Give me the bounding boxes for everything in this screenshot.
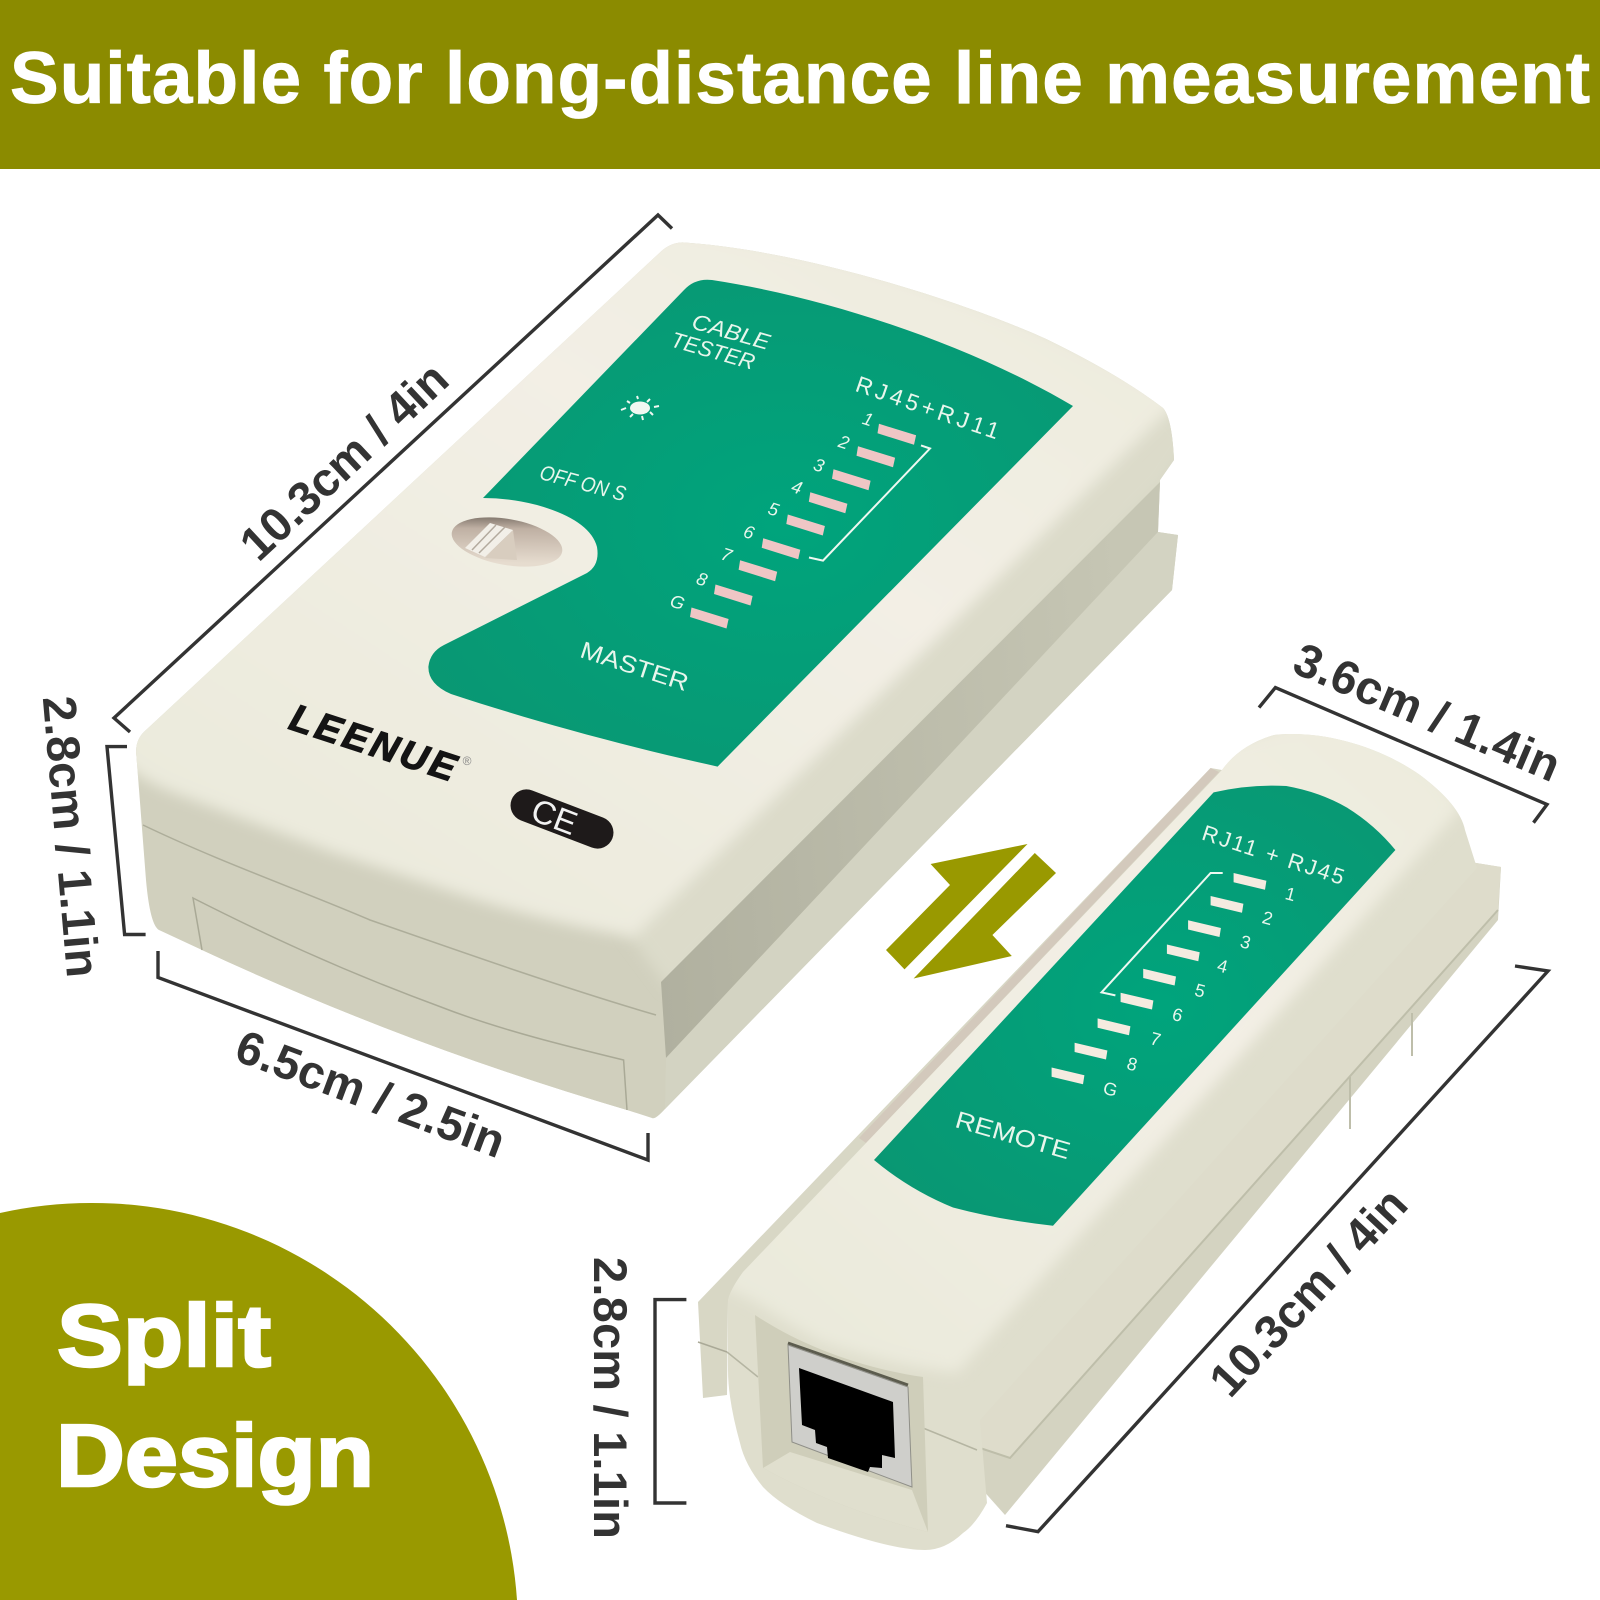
panel text: RJ45+RJ11 [852, 371, 1003, 444]
panel text: TESTER [668, 327, 758, 375]
indicator numbers: 4 [1215, 955, 1230, 977]
panel text [537, 309, 1003, 697]
CE badge [505, 783, 619, 856]
green label panel [874, 786, 1395, 1226]
master unit device [120, 230, 1195, 1118]
dimension: master height [33, 694, 146, 979]
panel text: RJ11 + RJ45 [1199, 820, 1348, 890]
indicator numbers: 8 [694, 568, 710, 590]
green label panel [428, 280, 1073, 767]
panel text: OFF ON S [537, 461, 628, 506]
indicator numbers: 7 [719, 544, 735, 566]
dimension: master width: 6.5cm / 2.5in [229, 1019, 513, 1168]
heading: split design: Split [57, 1286, 271, 1385]
indicator numbers: 5 [766, 498, 782, 521]
dimension: remote height: 2.8cm / 1.1in [584, 1257, 637, 1539]
panel text [952, 820, 1348, 1165]
indicator numbers: 6 [741, 521, 758, 544]
title: Suitable for long-distance line measurement [10, 38, 1590, 119]
heading: split design [56, 1286, 374, 1505]
dimension: master length [114, 215, 672, 732]
panel text: MASTER [577, 637, 692, 697]
pair bracket [809, 445, 930, 561]
indicator numbers [1101, 883, 1298, 1101]
brand logo: LEENUE [284, 697, 463, 791]
indicator numbers: 2 [1260, 907, 1275, 929]
indicator numbers [668, 408, 876, 614]
indicator numbers: 5 [1193, 980, 1207, 1002]
brand logo: ® [463, 754, 472, 768]
indicator numbers: 2 [835, 431, 852, 453]
dimension: remote width: 3.6cm / 1.4in [1286, 632, 1569, 792]
indicator numbers: G [1101, 1078, 1120, 1101]
dimension: remote length [1006, 966, 1548, 1532]
status indicators [1052, 873, 1266, 1084]
power switch [448, 510, 566, 574]
top banner [0, 0, 1600, 169]
remote unit device [698, 720, 1501, 1550]
indicator numbers: 7 [1148, 1028, 1163, 1050]
indicator numbers: G [668, 591, 687, 614]
RJ45 socket [755, 1315, 928, 1532]
dimension: master length: 10.3cm / 4in [229, 352, 458, 570]
status indicators RJ45 [690, 424, 916, 628]
heading: split design: Design [56, 1406, 374, 1505]
dimension: remote height [584, 1257, 686, 1539]
indicator numbers: 1 [860, 408, 876, 430]
indicator numbers: 1 [1283, 883, 1298, 905]
CE badge: CE [526, 791, 582, 842]
pair bracket [1102, 873, 1223, 995]
indicator numbers: 8 [1125, 1053, 1140, 1075]
icon: sun [621, 396, 659, 420]
arrows: swap between units [886, 844, 1056, 978]
indicator numbers: 3 [1238, 931, 1253, 953]
dimension: master width [158, 951, 648, 1168]
panel text: CABLE [689, 309, 773, 355]
panel: split design corner [0, 1203, 517, 1600]
dimension: master height: 2.8cm / 1.1in [33, 694, 110, 979]
indicator numbers: 6 [1170, 1004, 1185, 1026]
indicator numbers: 4 [789, 476, 805, 498]
indicator numbers: 3 [811, 454, 827, 476]
panel text: REMOTE [952, 1107, 1073, 1165]
dimension: remote length: 10.3cm / 4in [1199, 1177, 1417, 1406]
